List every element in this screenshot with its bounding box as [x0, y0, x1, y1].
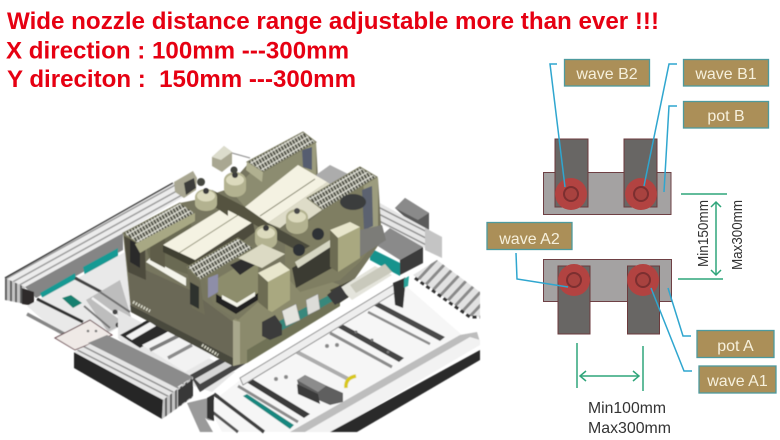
- title: Wide nozzle distance range adjustable more than ever !!!: [7, 8, 659, 35]
- X dimension text: Max300mm: [588, 420, 671, 437]
- diagram: nozzle layout: [487, 60, 776, 437]
- cable chain: [413, 260, 480, 317]
- Y dimension text: Min150mm: [695, 200, 712, 267]
- dark actuator: [340, 194, 366, 210]
- back-left rail: [5, 183, 192, 306]
- wave B1 nozzle: [625, 178, 657, 210]
- machine body left face: [128, 262, 233, 366]
- back top module: [232, 132, 350, 207]
- wave B2 nozzle: [555, 178, 587, 210]
- label: pot A: pot A: [717, 338, 754, 355]
- wave A1 nozzle: [627, 264, 659, 296]
- Y dimension text: [695, 200, 746, 270]
- control cabinets: [258, 222, 360, 312]
- X dimension text: [588, 400, 671, 437]
- solder pots: [195, 172, 324, 268]
- left base with rails: [27, 252, 134, 340]
- front-left rail block: [74, 335, 193, 419]
- label: wave B2: wave B2: [575, 66, 638, 83]
- label: wave A1: [699, 366, 776, 393]
- label: wave B1: wave B1: [694, 66, 757, 83]
- label: wave A2: wave A2: [498, 231, 560, 248]
- vertical dimension arrow: [678, 194, 727, 279]
- leader lines: [516, 64, 692, 371]
- label: wave A1: wave A1: [706, 373, 768, 390]
- illustration: soldering machine: [5, 132, 480, 432]
- machine silhouette: [123, 132, 382, 366]
- label: pot A: [697, 330, 774, 358]
- centre base with rails: [118, 310, 248, 392]
- yellow bracket: [346, 376, 356, 388]
- pot B with nozzles: [544, 139, 671, 214]
- front-right rail: [240, 276, 480, 432]
- Y dimension text: Max300mm: [729, 200, 746, 270]
- machine body right face: [233, 264, 392, 366]
- Y direction range text: Y direciton : 150mm ---300mm: [7, 66, 356, 93]
- mounting plate: [55, 320, 112, 350]
- right rail end with motor: [370, 198, 442, 276]
- label: wave B2: [564, 60, 650, 86]
- label: pot B: pot B: [707, 108, 745, 125]
- centre right module: [285, 172, 386, 292]
- label: wave B1: [684, 60, 768, 86]
- left module: [123, 203, 255, 286]
- rear cameras: [174, 146, 250, 198]
- right base plate with rails: [187, 285, 462, 432]
- horizontal dimension arrow: [577, 343, 643, 391]
- pot A with nozzles: [544, 260, 672, 334]
- X direction range text: X direction : 100mm ---300mm: [6, 38, 349, 64]
- top panels: [205, 165, 345, 252]
- label: wave A2: [487, 222, 572, 250]
- label: pot B: [684, 102, 768, 128]
- X dimension text: Min100mm: [588, 400, 666, 417]
- front module: [187, 238, 260, 320]
- right grill: [307, 167, 377, 210]
- servo motor: [297, 375, 343, 405]
- wave A2 nozzle: [558, 264, 590, 296]
